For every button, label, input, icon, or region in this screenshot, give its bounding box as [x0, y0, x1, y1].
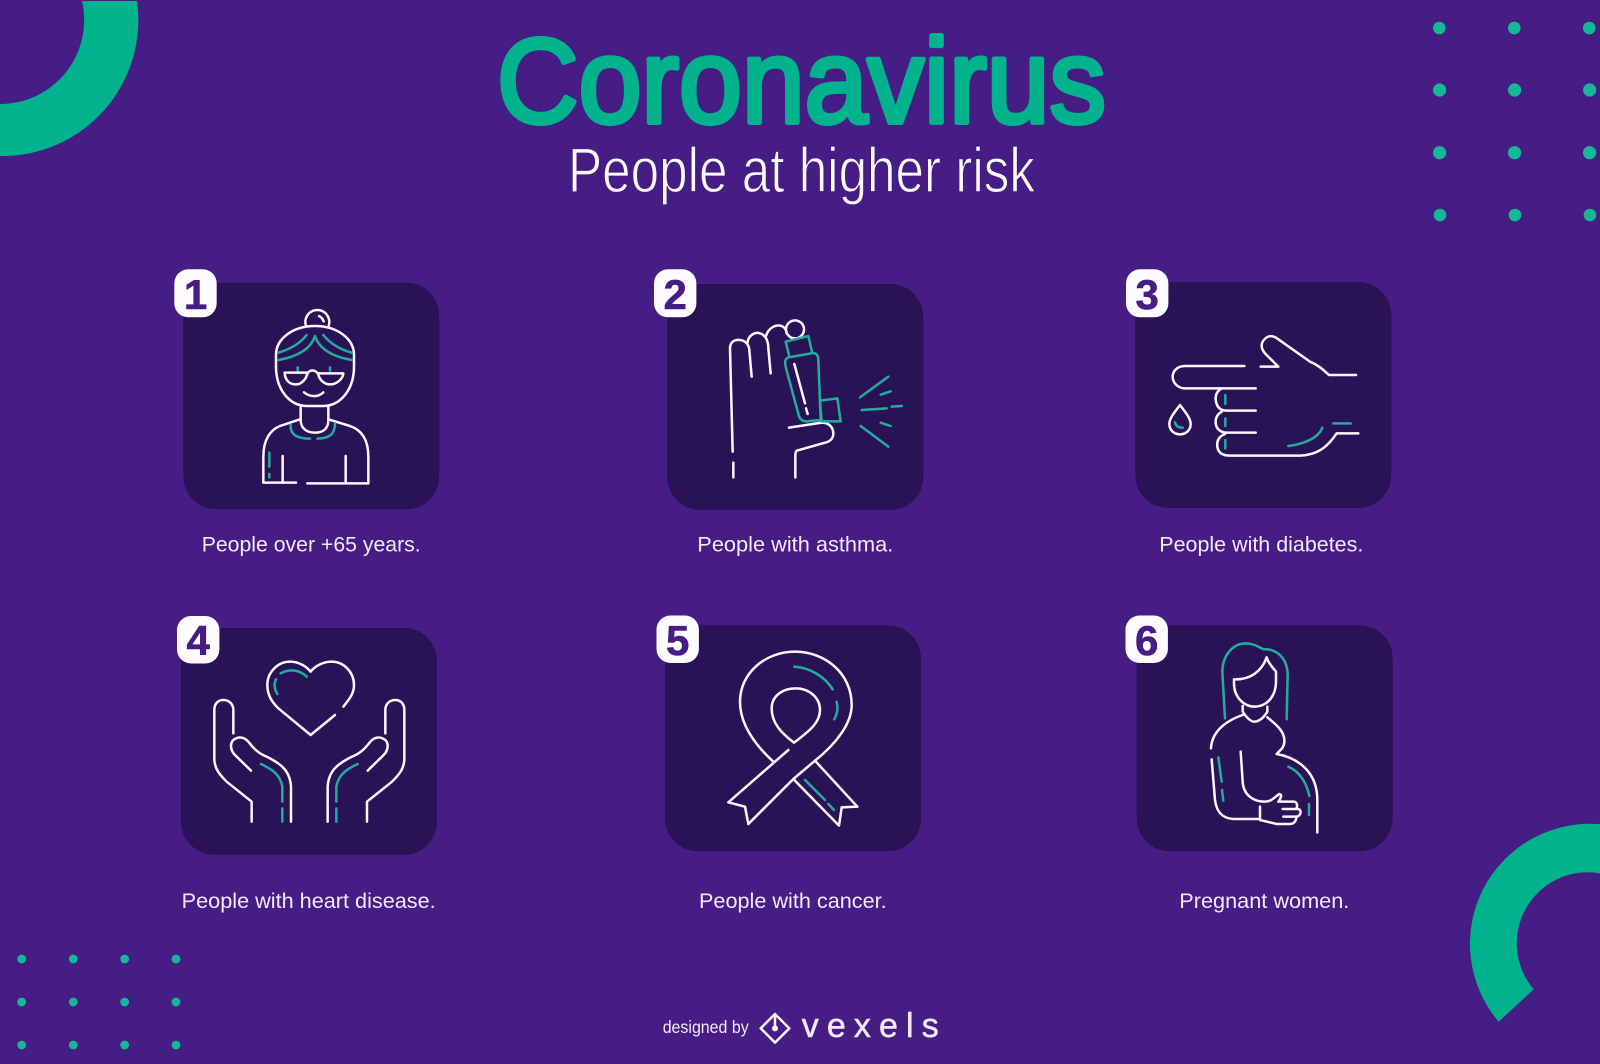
number badge 1: [174, 269, 217, 318]
panel 3: people with diabetes: [1126, 269, 1391, 557]
number badge 2: 2: [664, 271, 687, 318]
credit text: designed by: [663, 1017, 749, 1037]
label: People with asthma.: [697, 533, 893, 557]
number badge 5: [656, 616, 699, 664]
icon: awareness ribbon: [728, 652, 857, 826]
number badge 4: [177, 616, 219, 664]
label: Pregnant women.: [1179, 889, 1349, 913]
panel 6: pregnant women: [1126, 616, 1393, 913]
dot grid top right: [1433, 22, 1596, 221]
number badge 6: 6: [1135, 617, 1158, 664]
number badge 3: [1126, 269, 1168, 318]
panel 1: people over 65: [174, 269, 439, 557]
icon: hands holding heart: [214, 662, 404, 822]
number badge 5: 5: [666, 617, 689, 664]
icon: elderly woman: [263, 310, 368, 483]
decorative arc bottom right: [1470, 824, 1600, 1022]
number badge 1: 1: [184, 271, 207, 318]
number badge 3: 3: [1136, 271, 1159, 318]
label: People with cancer.: [699, 889, 887, 913]
label: People with heart disease.: [182, 889, 436, 913]
card background: [1137, 625, 1393, 851]
footer: designed by vexels: [663, 1007, 939, 1045]
label: People over +65 years.: [202, 533, 421, 557]
title: Coronavirus: [497, 14, 1106, 148]
icon: hand with blood drop: [1169, 336, 1358, 456]
card background: [665, 625, 921, 851]
number badge 2: [654, 269, 696, 318]
subtitle: People at higher risk: [568, 136, 1035, 206]
icon: hand with inhaler: [730, 320, 902, 477]
panel 4: people with heart disease: [177, 616, 437, 913]
label: People with diabetes.: [1159, 533, 1363, 557]
decorative arc top left: [0, 1, 138, 156]
panel 5: people with cancer: [656, 616, 921, 913]
card background: [181, 628, 437, 855]
icon: pregnant woman: [1211, 643, 1317, 832]
card background: [183, 283, 439, 509]
number badge 4: 4: [187, 617, 211, 664]
card background: [1135, 282, 1391, 508]
dot grid bottom left: [17, 955, 180, 1049]
icon: vexels diamond logo: [761, 1014, 789, 1043]
number badge 6: [1126, 616, 1168, 664]
wordmark: vexels: [802, 1007, 939, 1045]
panel 2: people with asthma: [654, 269, 923, 557]
card background: [667, 284, 923, 510]
